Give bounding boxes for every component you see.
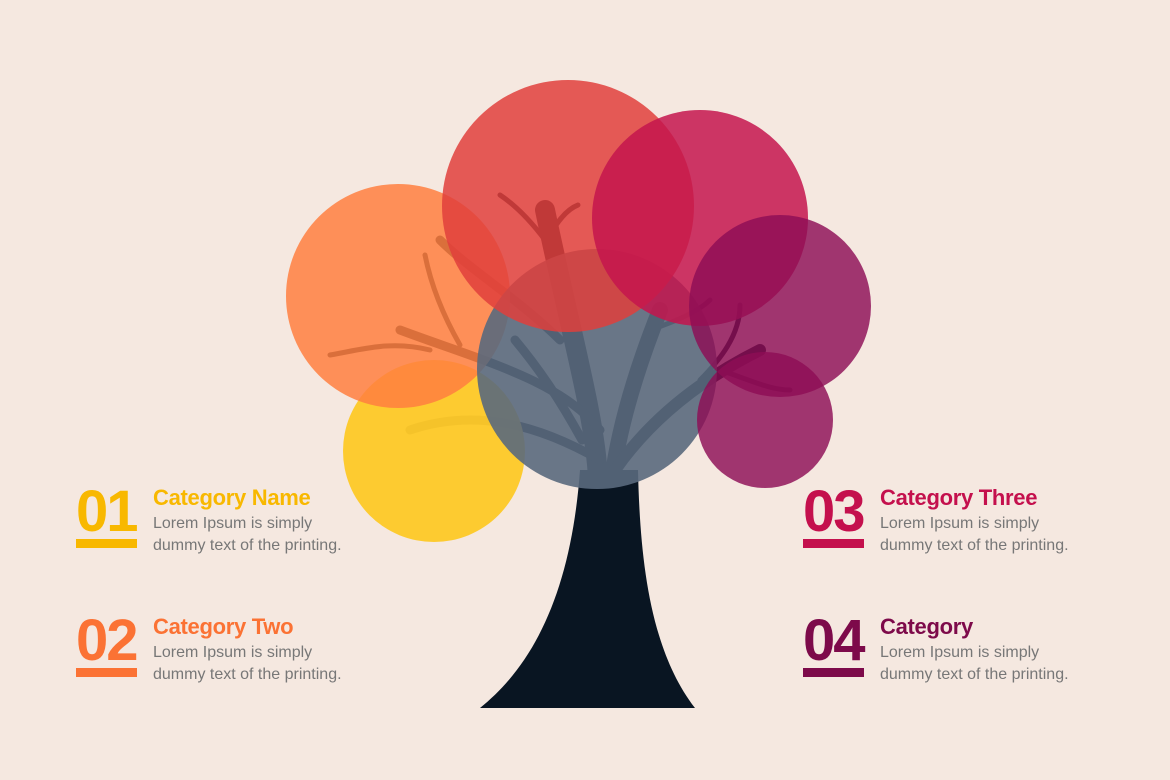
- item 02: Lorem Ipsum is simply: [153, 644, 312, 661]
- item 04: 04: [803, 608, 864, 673]
- circle: yellow: [343, 360, 525, 542]
- item 01: dummy text of the printing.: [153, 537, 342, 554]
- circle: purple large: [689, 215, 871, 397]
- item 04: Category: [880, 614, 973, 639]
- item 02: Category Two: [153, 614, 293, 639]
- item 03: Lorem Ipsum is simply: [880, 515, 1039, 532]
- item 01: Lorem Ipsum is simply: [153, 515, 312, 532]
- item 03: [803, 479, 1069, 554]
- item 02: [76, 608, 342, 683]
- item 03: 03: [803, 479, 864, 544]
- item 04: [803, 608, 1069, 683]
- circle: purple small: [697, 352, 833, 488]
- circle: pink: [592, 110, 808, 326]
- item 03: Category Three: [880, 485, 1037, 510]
- tree branches: [330, 195, 790, 480]
- tree trunk: [480, 470, 695, 708]
- item 03: dummy text of the printing.: [880, 537, 1069, 554]
- circle: red: [442, 80, 694, 332]
- item 01: Category Name: [153, 485, 310, 510]
- item 04: dummy text of the printing.: [880, 666, 1069, 683]
- item 02: dummy text of the printing.: [153, 666, 342, 683]
- item 01: [76, 479, 342, 554]
- item 01: 01: [76, 479, 137, 544]
- circle: orange: [286, 184, 510, 408]
- circle: grey center: [477, 249, 717, 489]
- item 04: Lorem Ipsum is simply: [880, 644, 1039, 661]
- item 02: 02: [76, 608, 137, 673]
